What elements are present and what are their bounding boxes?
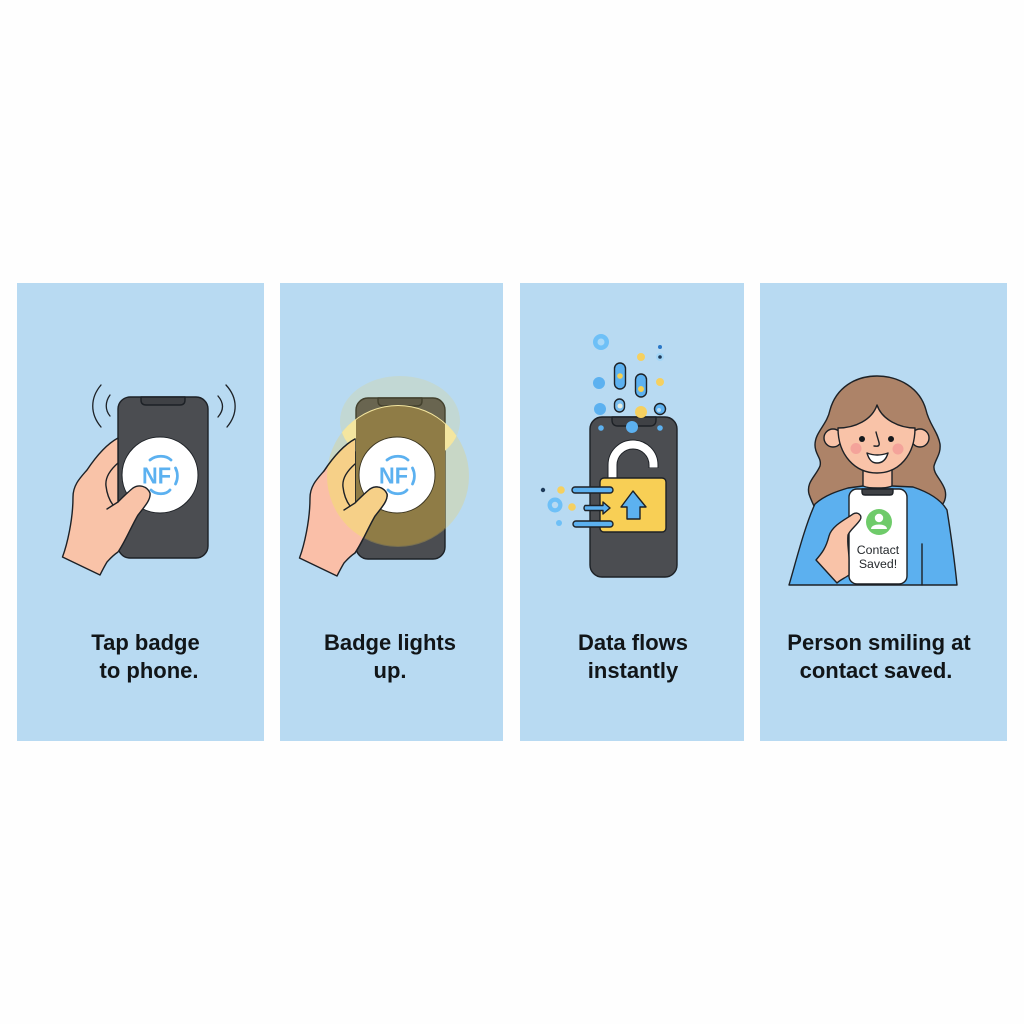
illustration: neck (863, 465, 892, 488)
panel: badge lights up (280, 283, 503, 741)
illustration: sweater (789, 486, 957, 585)
icon: contact avatar (866, 509, 892, 535)
illustration: held phone: Saved! (859, 557, 897, 571)
icon: NFC badge: NF (142, 462, 171, 488)
illustration: ears (824, 429, 929, 447)
glow: overlap of halos (342, 405, 456, 452)
particles: incoming data (541, 486, 576, 526)
icon: incoming data lines (572, 487, 613, 527)
panel: person smiling at contact saved (760, 283, 1007, 741)
illustration: held phone (849, 489, 907, 584)
particles: rising data (593, 334, 666, 433)
icon: signal waves right (218, 385, 235, 427)
panel: tap badge to phone (17, 283, 264, 741)
heading: person smiling at contact saved (787, 630, 971, 683)
heading: data flows instantly: Data flows (578, 630, 688, 655)
panel 3 background (520, 283, 744, 741)
illustration: smile (867, 453, 888, 463)
illustration: hair (808, 376, 946, 508)
heading: person smiling at contact saved: contact saved. (800, 658, 952, 683)
heading: badge lights up: up. (374, 658, 406, 683)
icon: hand (62, 438, 150, 575)
icon: open padlock (600, 444, 666, 532)
panel 4 background (760, 283, 1007, 741)
icon: NFC badge: NF (379, 462, 408, 488)
panel 2 background (280, 283, 503, 741)
glow: halo over phone (356, 406, 445, 546)
heading: data flows instantly: instantly (588, 658, 679, 683)
glow: main halo (327, 405, 469, 547)
icon: hand (298, 438, 388, 577)
icon: up arrow (621, 491, 646, 519)
panel 1 background (17, 283, 264, 741)
icon: NFC badge (359, 437, 435, 513)
icon: phone (118, 397, 208, 558)
illustration: sleeve fold (921, 544, 923, 585)
illustration: eyes and nose (859, 432, 894, 446)
illustration: cheeks (850, 443, 904, 454)
icon: NFC badge (122, 437, 198, 513)
heading: badge lights up: Badge lights (324, 630, 456, 655)
heading: badge lights up (324, 630, 456, 683)
heading: person smiling at contact saved: Person smiling at (787, 630, 971, 655)
icon: phone (590, 417, 677, 577)
heading: tap badge to phone (91, 630, 200, 683)
text: contact saved: Contact (857, 543, 900, 557)
icon: phone (356, 398, 445, 559)
heading: data flows instantly (578, 630, 688, 683)
illustration: hand holding phone (816, 513, 861, 583)
heading: tap badge to phone: to phone. (100, 658, 198, 683)
panel: data flows instantly (520, 283, 744, 741)
icon: signal waves left (93, 385, 110, 427)
heading: tap badge to phone: Tap badge (91, 630, 200, 655)
glow: upper halo (340, 376, 460, 466)
illustration: face (838, 405, 915, 473)
